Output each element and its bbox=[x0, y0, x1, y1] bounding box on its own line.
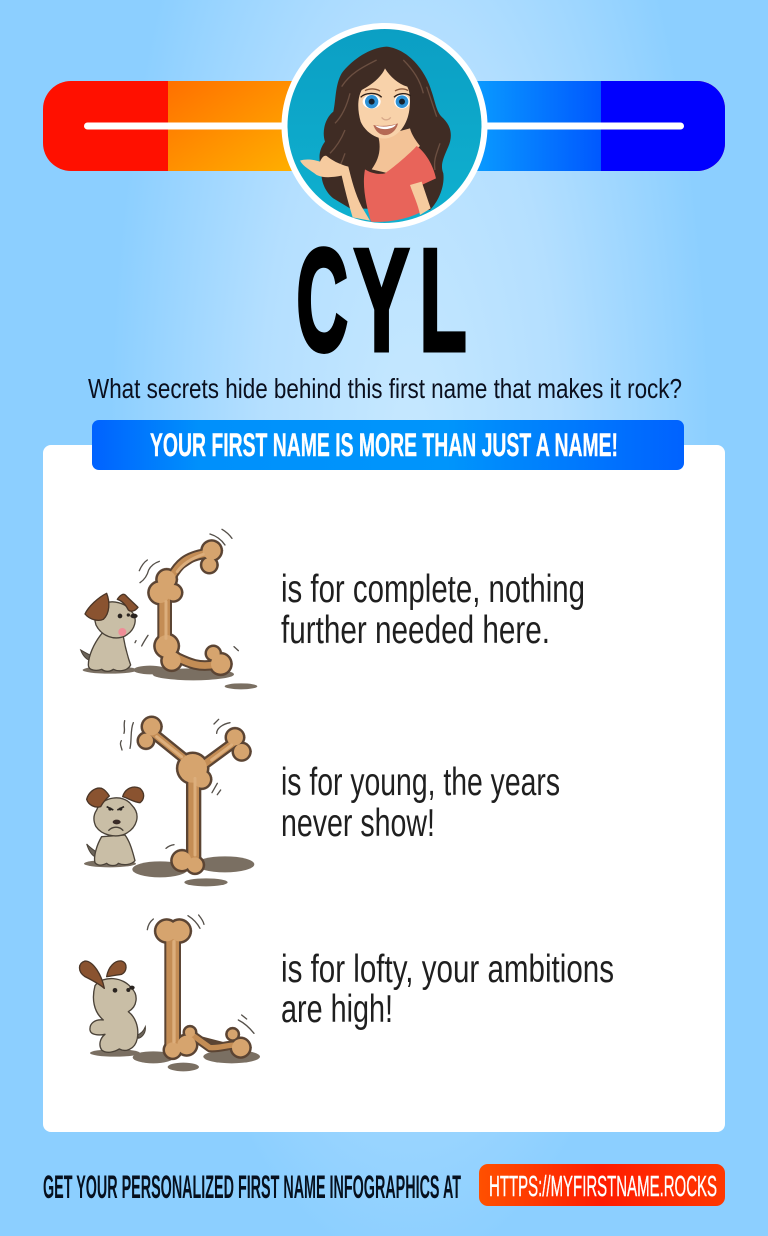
banner bbox=[92, 420, 684, 470]
text: letter C bbox=[281, 568, 585, 652]
icon: dog with bone letter Y bbox=[84, 716, 254, 886]
header colour bar bbox=[43, 81, 725, 171]
face bbox=[358, 68, 410, 139]
text: letter Y bbox=[281, 761, 560, 845]
panel: content card bbox=[43, 445, 725, 1132]
shirt bbox=[364, 146, 436, 222]
text: letter L: is for lofty, your ambitions bbox=[281, 948, 614, 991]
text: letter Y: never show! bbox=[281, 802, 435, 845]
text: letter C: is for complete, nothing bbox=[281, 568, 585, 611]
footer url button bbox=[479, 1164, 725, 1206]
text: letter L: are high! bbox=[281, 988, 393, 1031]
text: letter L bbox=[281, 948, 614, 1031]
hair bbox=[319, 47, 451, 210]
title: L bbox=[420, 219, 467, 381]
eyes bbox=[363, 95, 381, 109]
title: C bbox=[296, 220, 348, 382]
icon: dog with bone letter C bbox=[81, 529, 257, 689]
title bbox=[296, 219, 467, 382]
nose bbox=[382, 117, 391, 120]
neck and chest bbox=[372, 128, 420, 173]
text: letter Y: is for young, the years bbox=[281, 761, 560, 804]
icon: dog with bone letter L bbox=[79, 915, 260, 1071]
mouth bbox=[373, 123, 398, 135]
title: Y bbox=[354, 220, 409, 382]
text: letter C: further needed here. bbox=[281, 609, 550, 652]
icon: woman portrait bbox=[282, 23, 488, 229]
raised arm and hand bbox=[300, 156, 370, 221]
